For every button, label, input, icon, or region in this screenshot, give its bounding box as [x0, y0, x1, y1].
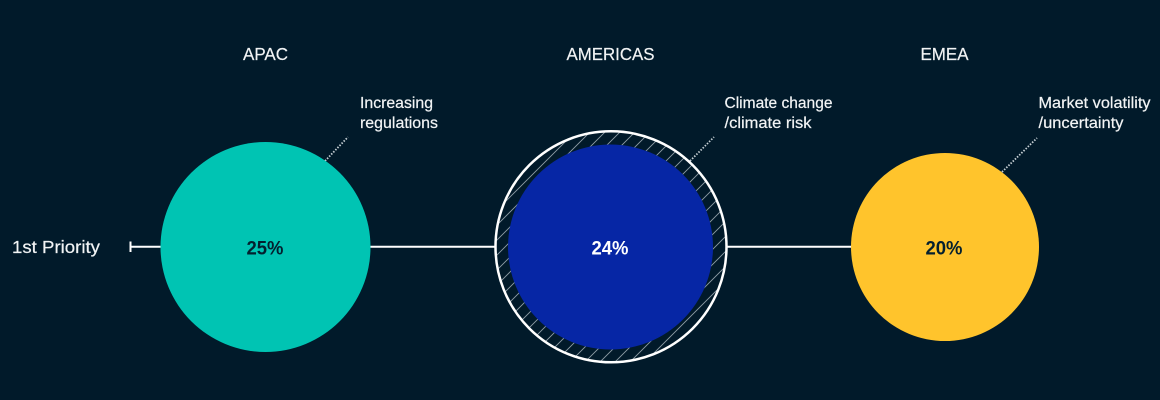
circle: AMERICAS 24% — [508, 144, 713, 350]
callout: Market volatility /uncertainty: /uncertainty — [1038, 115, 1124, 132]
value: 24%: 24% — [592, 238, 628, 260]
panel: AMERICAS — [496, 95, 832, 362]
panel: APAC — [160, 95, 438, 352]
row label: 1st Priority: 1st Priority — [12, 237, 100, 257]
value: 20%: 20% — [926, 238, 962, 260]
region heading: EMEA: EMEA — [920, 44, 969, 64]
priority axis line — [130, 242, 855, 252]
region heading: AMERICAS: AMERICAS — [566, 44, 654, 64]
callout: Increasing regulations: regulations — [360, 115, 438, 132]
circle: EMEA 20% — [851, 153, 1039, 341]
value: 25%: 25% — [246, 238, 284, 260]
leader line: EMEA — [1002, 138, 1037, 172]
callout: Market volatility /uncertainty: Market volatility — [1038, 95, 1151, 112]
callout: Increasing regulations: Increasing — [360, 95, 433, 112]
leader line: AMERICAS — [690, 137, 714, 161]
callout: Climate change /climate risk: Climate change — [724, 95, 832, 112]
callout: Climate change /climate risk: /climate risk — [724, 115, 812, 132]
region heading: APAC: APAC — [243, 44, 288, 64]
hatched ring: AMERICAS — [496, 131, 726, 362]
leader line: APAC — [325, 137, 348, 161]
circle: APAC 25% — [160, 142, 370, 352]
panel: EMEA — [851, 95, 1151, 341]
